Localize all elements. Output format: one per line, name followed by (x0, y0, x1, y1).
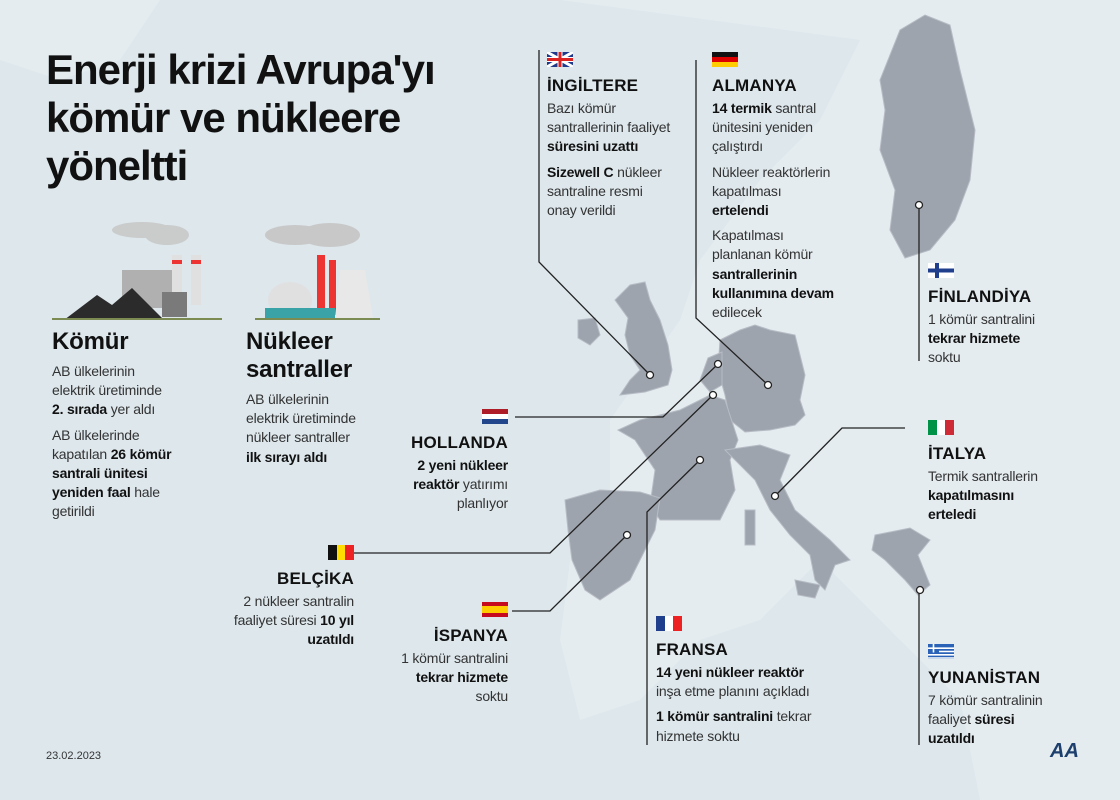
panel: Italy: İTALYA (928, 444, 986, 463)
panel: Belgium: BELÇİKA (277, 569, 354, 588)
panel: Finland (928, 263, 1035, 365)
panel: Spain: tekrar hizmete (416, 669, 508, 685)
panel: Netherlands: HOLLANDA (411, 433, 508, 452)
panel: Germany: kapatılması (712, 183, 781, 199)
title: yöneltti (46, 142, 187, 189)
panel: Spain: 1 kömür santralini (401, 650, 508, 666)
panel: coal: yeniden faal hale (52, 484, 160, 500)
panel: nuclear: nükleer santraller (246, 429, 350, 445)
panel: nuclear: elektrik üretiminde (246, 410, 356, 426)
panel: coal: getirildi (52, 503, 95, 519)
panel: France: 1 kömür santralini tekrar (656, 708, 811, 724)
panel: Finland: soktu (928, 349, 960, 365)
panel: France: inşa etme planını açıkladı (656, 683, 810, 699)
panel: Germany: santrallerinin (712, 266, 797, 282)
panel: Finland: 1 kömür santralini (928, 311, 1035, 327)
panel: Belgium (234, 545, 354, 647)
panel: Germany: Nükleer reaktörlerin (712, 164, 830, 180)
panel: Germany: edilecek (712, 304, 762, 320)
panel: coal: AB ülkelerinde (52, 427, 139, 443)
panel: Netherlands (411, 409, 508, 511)
panel: Germany (712, 52, 834, 320)
title: Enerji krizi Avrupa'yı (46, 46, 435, 93)
date: 23.02.2023 (46, 750, 101, 762)
panel: Germany: ünitesini yeniden (712, 119, 813, 135)
panel: Greece: YUNANİSTAN (928, 668, 1040, 687)
title (46, 46, 435, 189)
panel: Germany: Kapatılması (712, 227, 784, 243)
panel: England: İNGİLTERE (547, 76, 638, 95)
panel: England: onay verildi (547, 202, 615, 218)
panel: Germany: çalıştırdı (712, 138, 763, 154)
panel: Italy (928, 420, 1038, 522)
panel: nuclear: Nükleer (246, 328, 333, 355)
panel: Italy: Termik santrallerin (928, 468, 1038, 484)
panel: Italy: kapatılmasını (928, 487, 1014, 503)
panel: nuclear: santraller (246, 356, 352, 383)
panel: coal: Kömür (52, 328, 128, 355)
panel: Germany: ALMANYA (712, 76, 797, 95)
panel: Spain: İSPANYA (434, 626, 508, 645)
panel: England: Bazı kömür (547, 100, 616, 116)
panel: coal: elektrik üretiminde (52, 382, 162, 398)
panel: Greece: faaliyet süresi (928, 711, 1015, 727)
map: highlighted countries (565, 15, 975, 600)
icon: AA logo: AA (1050, 740, 1079, 762)
panel: Italy: erteledi (928, 506, 976, 522)
panel: coal: kapatılan 26 kömür (52, 446, 171, 462)
panel: England: Sizewell C nükleer (547, 164, 662, 180)
panel: coal: 2. sırada yer aldı (52, 401, 155, 417)
panel: Greece: uzatıldı (928, 730, 975, 746)
leader lines (340, 50, 919, 745)
panel: England: santrallerinin faaliyet (547, 119, 670, 135)
panel: Germany: 14 termik santral (712, 100, 816, 116)
panel: nuclear (246, 328, 356, 465)
panel: Greece (928, 644, 1042, 746)
panel: Belgium: uzatıldı (307, 631, 354, 647)
panel: France: 14 yeni nükleer reaktör (656, 664, 804, 680)
panel: coal (52, 328, 172, 519)
panel: nuclear: AB ülkelerinin (246, 391, 329, 407)
icon: nuclear plant (255, 223, 380, 320)
panel: coal: santrali ünitesi (52, 465, 148, 481)
panel: coal: AB ülkelerinin (52, 363, 135, 379)
panel: Germany: kullanımına devam (712, 285, 834, 301)
panel: France: FRANSA (656, 640, 728, 659)
panel: France (656, 616, 812, 744)
panel: Finland: FİNLANDİYA (928, 287, 1031, 306)
panel: Belgium: faaliyet süresi 10 yıl (234, 612, 354, 628)
panel: Germany: planlanan kömür (712, 246, 813, 262)
panel: Spain (401, 602, 508, 704)
panel: Netherlands: 2 yeni nükleer (417, 457, 508, 473)
panel: nuclear: ilk sırayı aldı (246, 449, 327, 465)
icon: coal plant (52, 222, 222, 320)
panel: England: santraline resmi (547, 183, 643, 199)
panel: Finland: tekrar hizmete (928, 330, 1020, 346)
panel: Spain: soktu (476, 688, 508, 704)
panel: Belgium: 2 nükleer santralin (243, 593, 354, 609)
panel: England: süresini uzattı (547, 138, 638, 154)
panel: France: hizmete soktu (656, 728, 740, 744)
panel: England (547, 52, 670, 218)
panel: Netherlands: planlıyor (457, 495, 508, 511)
panel: Greece: 7 kömür santralinin (928, 692, 1042, 708)
title: kömür ve nükleere (46, 94, 400, 141)
panel: Germany: ertelendi (712, 202, 769, 218)
panel: Netherlands: reaktör yatırımı (413, 476, 508, 492)
